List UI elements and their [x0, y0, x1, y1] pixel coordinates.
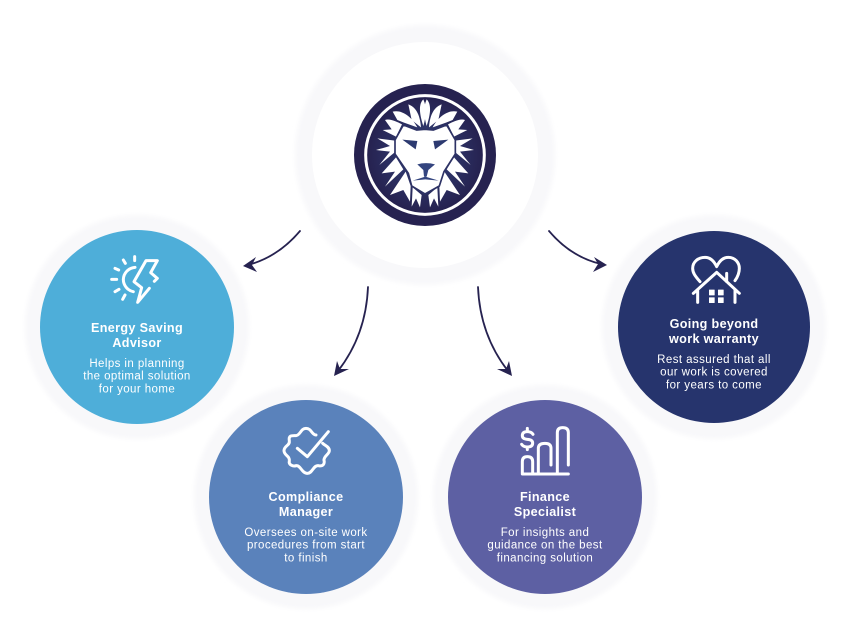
heading: Energy Saving Advisor: Advisor — [112, 336, 162, 350]
heading: Going beyond work warranty: work warranty — [668, 332, 759, 346]
heading: Finance Specialist: Specialist — [514, 505, 577, 519]
arrow: to Going beyond work warranty — [549, 231, 607, 272]
heading: Compliance Manager: Compliance — [269, 490, 343, 504]
text: Warranty description: Rest assured that all — [657, 354, 771, 366]
text: Energy description: the optimal solution — [83, 371, 191, 383]
text: Finance description: guidance on the best — [487, 540, 603, 552]
icon: sun and lightning bolt — [112, 257, 157, 302]
text: Energy description: Helps in planning — [89, 358, 185, 370]
text: Compliance description: Oversees on-site work — [244, 527, 368, 539]
icon: lion logo — [354, 84, 496, 226]
panel: Compliance Manager — [194, 385, 418, 609]
arrow: to Compliance Manager — [334, 287, 368, 376]
arrow: to Energy Saving Advisor — [243, 231, 300, 272]
arrow: to Finance Specialist — [478, 287, 512, 376]
text: Compliance description: procedures from start — [247, 540, 365, 552]
heading: Finance Specialist: Finance — [520, 490, 570, 504]
text: Compliance description: to finish — [284, 552, 328, 564]
icon: heart and house — [693, 257, 739, 303]
text: Warranty description: for years to come — [666, 379, 762, 391]
icon: gear with check mark — [284, 428, 329, 473]
heading: Going beyond work warranty: Going beyond — [670, 317, 758, 331]
icon: dollar and bar chart — [522, 428, 568, 474]
heading: Energy Saving Advisor: Energy Saving — [91, 321, 183, 335]
panel: Going beyond work warranty — [602, 215, 826, 439]
panel: Energy Saving Advisor — [25, 215, 249, 439]
text: Warranty description: our work is covered — [660, 367, 768, 379]
text: Finance description: For insights and — [501, 527, 589, 539]
heading: Compliance Manager: Manager — [279, 505, 333, 519]
text: Energy description: for your home — [99, 383, 175, 395]
text: Finance description: financing solution — [497, 552, 593, 564]
panel: central logo circle — [295, 25, 555, 285]
panel: Finance Specialist — [433, 385, 657, 609]
